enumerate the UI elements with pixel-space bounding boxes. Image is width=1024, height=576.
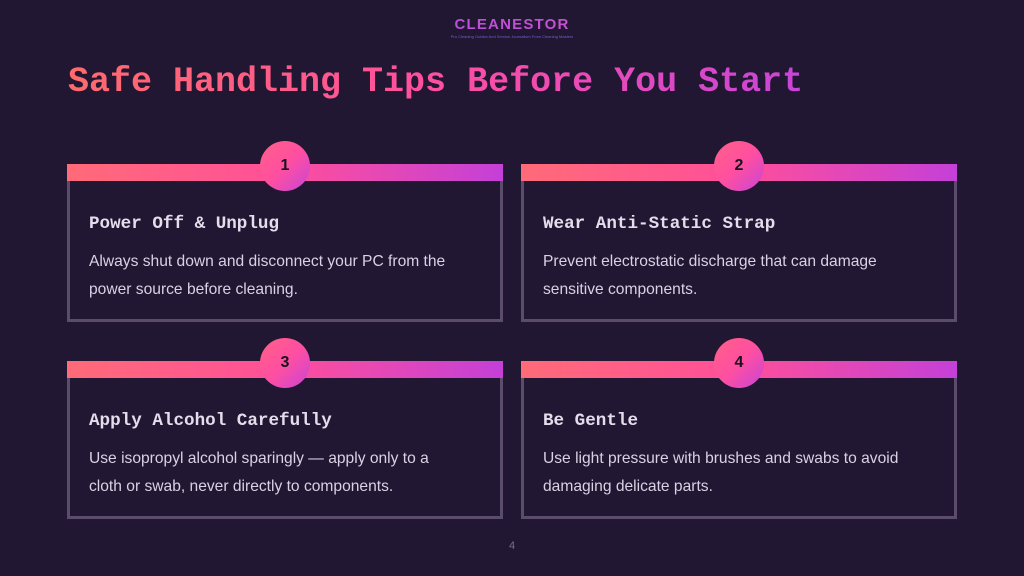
badge 1: 1	[281, 157, 289, 174]
badge 4: 4	[735, 354, 743, 371]
badge 3	[260, 338, 310, 388]
heading 3: Apply Alcohol Carefully	[89, 411, 332, 431]
text 3: Use isopropyl alcohol sparingly — apply only to a	[89, 450, 429, 467]
text 4: Use light pressure with brushes and swabs to avoid	[543, 450, 898, 467]
badge 2	[714, 141, 764, 191]
text 1: power source before cleaning.	[89, 281, 298, 298]
text 4: damaging delicate parts.	[543, 478, 713, 495]
title: Safe Handling Tips Before You Start	[68, 62, 803, 102]
logo: Pro Cleaning Guides And Service Journalism From Cleaning Masters	[451, 34, 573, 39]
text 2: Prevent electrostatic discharge that can damage	[543, 253, 877, 270]
text 1: Always shut down and disconnect your PC from the	[89, 253, 445, 270]
text 1	[89, 253, 445, 298]
heading 4: Be Gentle	[543, 411, 638, 431]
card 4	[521, 338, 957, 519]
heading 2: Wear Anti-Static Strap	[543, 214, 775, 234]
badge 4	[714, 338, 764, 388]
badge 1	[260, 141, 310, 191]
text 3: cloth or swab, never directly to components.	[89, 478, 393, 495]
text 3	[89, 450, 429, 495]
badge 3: 3	[281, 354, 289, 371]
logo: CLEANESTOR	[454, 16, 570, 33]
text 4	[543, 450, 898, 495]
card 2	[521, 141, 957, 322]
text 2	[543, 253, 877, 298]
page number: 4	[509, 540, 515, 552]
badge 2: 2	[735, 157, 743, 174]
logo	[451, 16, 574, 39]
card 3	[67, 338, 503, 519]
card 1	[67, 141, 503, 322]
heading 1: Power Off & Unplug	[89, 214, 279, 234]
text 2: sensitive components.	[543, 281, 697, 298]
